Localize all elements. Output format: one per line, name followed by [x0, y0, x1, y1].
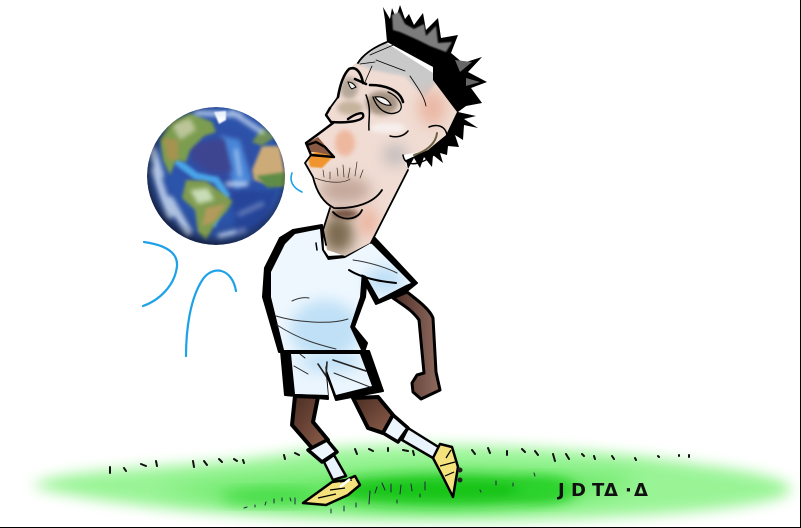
- green grass ground: [32, 445, 791, 520]
- Africa: [252, 146, 287, 185]
- right leg: [353, 397, 462, 497]
- spiky hair: [383, 5, 487, 169]
- lips: [308, 152, 334, 169]
- Europe: [252, 128, 276, 146]
- eyes: [375, 97, 391, 105]
- North America: [160, 113, 216, 175]
- arm: [393, 292, 440, 399]
- head outline: [305, 42, 447, 245]
- South America: [182, 180, 233, 240]
- artist signature: JDTΔ·Δ: [556, 480, 648, 501]
- Greenland ice: [214, 111, 226, 124]
- grass tick marks: [110, 448, 689, 513]
- left boot: [303, 476, 360, 505]
- central dark atlantic: [190, 138, 232, 172]
- blue impact lines: [143, 173, 302, 356]
- left leg: [292, 396, 360, 505]
- right boot: [433, 444, 458, 497]
- shorts: [281, 351, 383, 400]
- shirt: [263, 225, 417, 360]
- earth globe: [147, 107, 287, 245]
- clouds: [152, 112, 262, 236]
- head: [305, 30, 457, 256]
- bright shallow ocean bands: [175, 160, 226, 226]
